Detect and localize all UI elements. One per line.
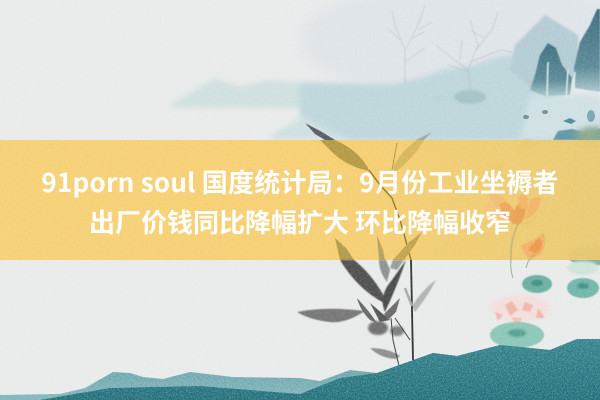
bamboo lower ink leaves and stem	[297, 260, 436, 366]
pale pink lotus and green lily pads	[490, 260, 599, 348]
headline line one: 91porn soul 国度统计局：9月份工业坐褥者	[41, 163, 559, 200]
bare winter trees	[388, 5, 512, 97]
bamboo upper leaves in ink above banner	[305, 123, 432, 140]
teal foreground hills	[0, 335, 600, 400]
pale middle mountains	[300, 15, 600, 140]
orange lotus flower	[482, 192, 545, 262]
misty sky wash	[300, 0, 600, 144]
banner band	[0, 140, 600, 260]
lily pads and lotus under the banner	[487, 126, 600, 266]
headline line two: 出厂价钱同比降幅扩大 环比降幅收窄	[89, 203, 511, 240]
distant hills left	[172, 79, 500, 140]
dark ink cliffs right	[530, 9, 600, 100]
bamboo leaves tinted gold through banner	[320, 140, 424, 260]
shrubs and pagoda details	[432, 90, 600, 140]
